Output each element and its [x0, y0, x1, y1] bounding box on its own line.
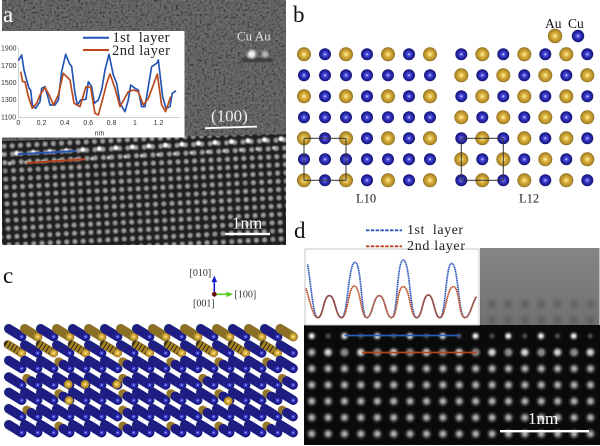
- chart axes and ticks: 1700: [1, 63, 17, 70]
- L10 lattice: [297, 47, 437, 187]
- legend: 1st layer: [407, 223, 463, 238]
- chart axes and ticks: 1100: [1, 115, 16, 122]
- crystal axes: [190, 268, 256, 310]
- legend: 2nd layer: [407, 239, 465, 254]
- atom legend Au Cu: [545, 16, 584, 43]
- crystal axes: [001]: [193, 298, 215, 310]
- panel a: STEM image with line profile: [0, 0, 290, 245]
- legend: 1st layer: [112, 30, 170, 46]
- inset line chart: [305, 249, 479, 325]
- (100) direction label: [205, 106, 257, 128]
- chart axes and ticks: 0.8: [107, 120, 116, 127]
- chart axes and ticks: 0: [16, 120, 20, 127]
- inset line chart: [0, 30, 184, 138]
- atom legend Au Cu: Au: [545, 16, 562, 31]
- scale bar 1nm: 1nm: [232, 214, 262, 232]
- chart axes and ticks: 1900: [1, 46, 17, 53]
- crystal axes: [010]: [190, 268, 211, 279]
- crystal axes: [100]: [234, 290, 256, 300]
- curve: 2nd layer: [306, 286, 477, 318]
- gold atoms: [64, 380, 73, 389]
- label L10: L10: [356, 192, 376, 206]
- panel b: crystal models: [293, 2, 594, 206]
- curve: 1st layer: [18, 54, 176, 112]
- STEM image background: [0, 0, 290, 245]
- legend: 2nd layer: [112, 43, 170, 59]
- curve: 2nd layer: [21, 72, 171, 115]
- label L12: L12: [519, 192, 539, 206]
- atom rods: [7, 329, 298, 436]
- chart axes and ticks: 0.4: [60, 120, 70, 127]
- chart axes and ticks: nm: [95, 130, 105, 137]
- legend: [366, 223, 465, 254]
- atom legend Au Cu: Cu: [568, 16, 584, 31]
- curve: 1st layer: [308, 260, 477, 318]
- profile lines on image: [344, 336, 477, 352]
- profile lines on image: [18, 151, 85, 163]
- chart axes and ticks: 1.2: [154, 120, 163, 127]
- panel label a: a: [3, 2, 13, 27]
- legend: [83, 30, 170, 59]
- atom reference Cu Au: [237, 28, 273, 62]
- panel c: 3D crystal model: [3, 263, 298, 436]
- panel d: simulated image with line profile: [294, 218, 600, 445]
- simulated image: [304, 325, 600, 445]
- panel label c: c: [3, 263, 13, 288]
- (100) direction label: (100): [211, 106, 248, 126]
- chart axes and ticks: 1: [133, 120, 137, 127]
- chart axes and ticks: 0.2: [37, 120, 46, 127]
- chart axes and ticks: 1500: [1, 80, 17, 87]
- chart axes and ticks: 0.6: [83, 120, 93, 127]
- scale bar 1nm: 1nm: [528, 409, 558, 428]
- L12 lattice: [454, 47, 594, 187]
- grey vacuum region: [480, 248, 600, 325]
- atom reference Cu Au: Cu Au: [237, 28, 271, 44]
- scale bar 1nm: [225, 214, 270, 235]
- chart axes and ticks: [1, 46, 180, 137]
- chart axes and ticks: 1300: [1, 97, 17, 104]
- panel label d: d: [294, 218, 306, 243]
- panel label b: b: [293, 2, 304, 27]
- scale bar 1nm: [500, 409, 589, 432]
